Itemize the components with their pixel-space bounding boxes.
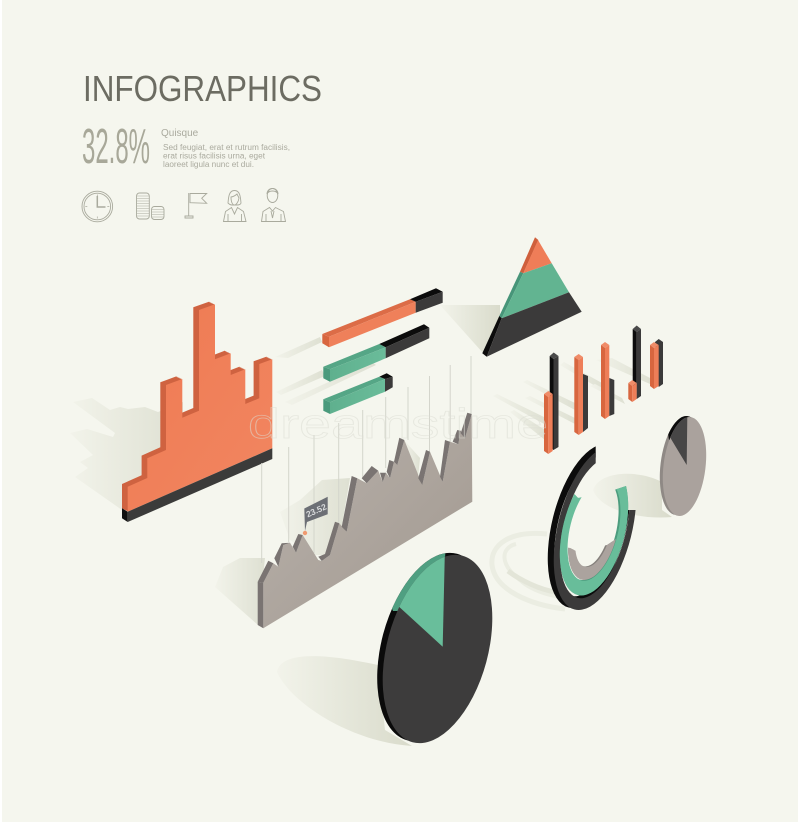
icon: clock [82, 191, 113, 222]
vertical bar: orange 3 [601, 342, 609, 419]
vertical bar: orange 4 [628, 380, 637, 402]
green ring [560, 486, 628, 596]
vertical bar: dark 3 [609, 378, 614, 416]
icon: woman [224, 190, 246, 222]
gray ring [568, 539, 616, 580]
vertical bar: orange 2 [574, 354, 583, 435]
bar 1 [322, 288, 443, 347]
chart: large pie [377, 552, 492, 744]
text block: Quisque: laoreet ligula nunc et dui. [163, 160, 254, 169]
value flag [303, 497, 328, 535]
thin vertical chart lines [262, 356, 471, 563]
pie green slice [399, 556, 445, 647]
vertical bar: dark 5 [655, 339, 663, 387]
chart: horizontal bars [322, 288, 443, 414]
pie green edge [392, 553, 446, 611]
vertical bar: dark 2 [583, 374, 588, 432]
vertical bar: dark 1 [550, 352, 558, 450]
chart: pyramid [482, 237, 582, 357]
chart: orange isometric histogram [122, 302, 272, 522]
shadows: horizontal bars [275, 337, 376, 405]
small pie black edge slice [668, 416, 692, 440]
icon: man [262, 188, 286, 222]
text: 32.8% [82, 120, 150, 174]
histogram front face [128, 304, 272, 512]
watermark: dreamstime [248, 400, 548, 447]
shadow: area chart [215, 440, 420, 625]
shadow: ring chart [492, 533, 565, 609]
shadow: large pie [277, 656, 412, 746]
vertical bar: orange 5 [650, 342, 659, 389]
pyramid top [520, 237, 552, 273]
value flag: 23.52 [304, 501, 328, 519]
shadows: vertical bars [493, 358, 650, 440]
shadow: small pie [593, 474, 672, 518]
text block: Quisque: Sed feugiat, erat et rutrum facilisis, [163, 143, 290, 152]
title: INFOGRAPHICS [83, 68, 322, 109]
shadow: pyramid [440, 305, 500, 353]
pie dark face [364, 543, 511, 755]
pyramid base [482, 292, 582, 357]
chart: gray area line chart [258, 413, 472, 628]
vertical bar: dark 4 [633, 326, 641, 399]
text block: Quisque: Quisque [161, 128, 199, 139]
histogram base [122, 448, 272, 522]
text block: Quisque: erat risus facilisis urna, eget [163, 152, 266, 160]
outer dark ring [548, 446, 636, 610]
area chart front [263, 414, 472, 628]
pie black edge [358, 541, 506, 753]
pyramid middle [499, 263, 569, 318]
small pie dark slice [670, 418, 688, 465]
histogram depth [122, 302, 271, 511]
vertical bar: orange 1 [544, 391, 553, 454]
icon: flag [185, 193, 207, 218]
area chart depth [258, 413, 472, 628]
small pie face [658, 415, 711, 518]
icon row [82, 188, 286, 222]
shadow: histogram [70, 398, 183, 515]
bar 2 [323, 324, 429, 382]
small pie edge [655, 414, 708, 517]
chart: ring chart [548, 446, 636, 610]
bar 3 [323, 373, 393, 414]
chart: small pie [660, 416, 706, 516]
chart: vertical bars [544, 326, 663, 454]
text block: Quisque [161, 128, 290, 169]
icon: coins [136, 193, 164, 220]
